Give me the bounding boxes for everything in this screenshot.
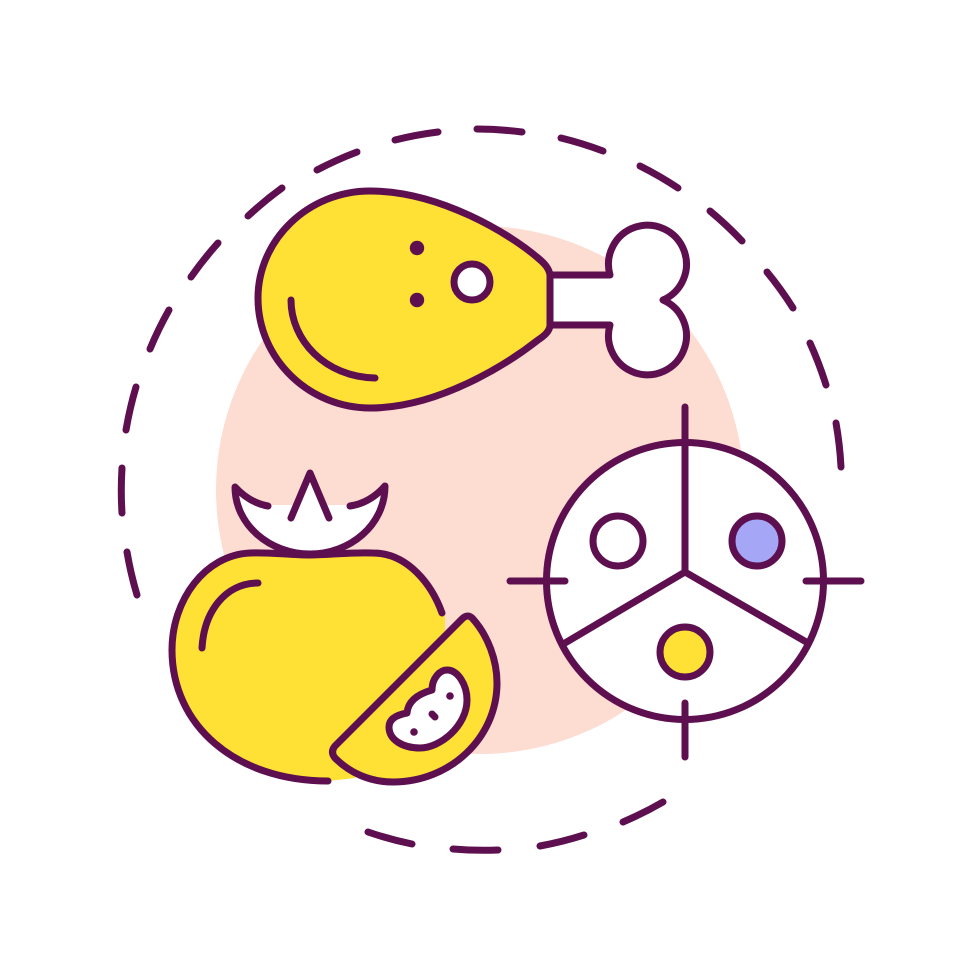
dashed circle ring	[121, 129, 841, 850]
target segment dividers	[565, 407, 808, 643]
seeds	[410, 692, 454, 736]
tomato body fill	[172, 553, 445, 781]
target circle	[546, 442, 824, 720]
icon: tomato with slice	[172, 473, 497, 782]
tomato slice	[332, 616, 497, 782]
meat ring	[454, 264, 490, 300]
drumstick meat	[258, 191, 550, 408]
tomato center leaf	[291, 473, 329, 518]
drumstick bone	[548, 225, 686, 375]
tomato highlight	[202, 583, 258, 648]
icon: target with three nutrient segments	[510, 407, 861, 757]
meat dot upper	[410, 241, 424, 255]
yellow nutrient dot	[660, 627, 710, 677]
slice seed pocket	[389, 670, 467, 748]
meat highlight	[291, 300, 375, 378]
blue nutrient dot	[732, 516, 782, 566]
icon: chicken drumstick	[258, 191, 686, 408]
white nutrient dot	[593, 516, 643, 566]
crosshair ticks	[510, 581, 861, 757]
tomato body outline	[172, 553, 442, 781]
meat dot lower	[410, 293, 424, 307]
background pink circle	[216, 226, 744, 754]
tomato leaves fill	[235, 473, 385, 554]
tomato leaves outline	[235, 486, 385, 554]
